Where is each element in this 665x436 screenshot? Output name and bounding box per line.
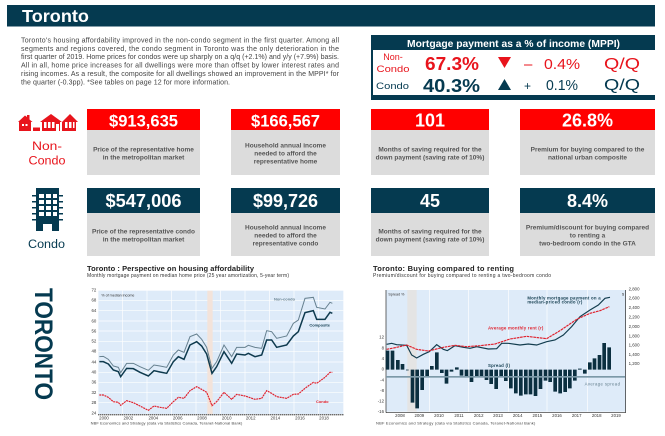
chart labels: 4 [382, 356, 385, 361]
card: premium condo: 8.4% [567, 191, 608, 211]
chart source: NBF Economics and Strategy (data via Statistics Canada, Teranet-National Bank) [376, 420, 536, 425]
chart labels: % of median income [101, 293, 134, 297]
chart labels: 2011 [454, 413, 464, 418]
MPPI row: condo: Condo [376, 81, 409, 92]
chart heading: affordability: Monthly mortgage payment on median home price (25 year amortization, 5-year term) [87, 273, 289, 279]
chart heading: buying vs renting: Toronto: Buying compared to renting [373, 264, 514, 273]
MPPI row: condo [376, 75, 640, 96]
card: representative condo price [87, 188, 200, 256]
card: premium condo: two-bedroom condo in the GTA [539, 240, 636, 248]
chart labels: 2006 [173, 416, 183, 421]
chart labels: 2016 [295, 416, 305, 421]
chart labels: 1,400 [629, 352, 640, 357]
chart labels: Spread % [388, 293, 405, 297]
chart heading: buying vs renting: Premium/discount for buying compared to renting a two-bedroom condo [373, 273, 551, 279]
chart labels: -16 [378, 409, 385, 414]
card: months saving condo: down payment (saving rate of 10%) [376, 236, 484, 244]
card: premium non-condo: 26.8% [562, 110, 613, 130]
chart labels: 2014 [513, 413, 523, 418]
chart labels: 2014 [271, 416, 281, 421]
card: household income condo: Household annual income [245, 224, 326, 232]
chart labels: 2018 [319, 416, 329, 421]
card: months saving condo: Months of saving required for the [378, 228, 482, 236]
chart labels: 2000 [99, 416, 109, 421]
chart labels: 36 [92, 380, 97, 385]
label: non-condo: Non- [32, 141, 62, 153]
chart labels: 12 [379, 335, 385, 340]
chart labels: 2016 [552, 413, 562, 418]
card: months saving non-condo: 101 [415, 110, 445, 130]
chart labels: 72 [92, 287, 97, 292]
chart labels: 2012 [246, 416, 256, 421]
intro text block: All in all, home price increases for all dwellings were more than offset by lower interest rates and [21, 62, 339, 70]
MPPI row: non-condo: – [524, 56, 533, 73]
card: premium condo: Premium/discount for buying compared [526, 224, 649, 232]
card: representative condo price: Price of the representative condo [92, 228, 195, 236]
series: non-condo [99, 297, 332, 373]
chart heading: buying vs renting [373, 264, 551, 279]
chart labels: -4 [380, 377, 385, 382]
card: premium condo [520, 188, 655, 256]
chart labels: 44 [92, 359, 97, 364]
MPPI row: non-condo: Condo [376, 64, 410, 74]
title banner: Toronto [22, 6, 89, 26]
chart labels: median-priced condo (r) [527, 300, 583, 305]
chart labels: $ [622, 293, 624, 297]
chart labels: 2009 [415, 413, 425, 418]
chart labels: 64 [92, 308, 97, 313]
chart labels: Average spread [585, 381, 621, 386]
title banner [7, 5, 655, 26]
chart labels: 2008 [197, 416, 207, 421]
chart source: NBF Economics and Strategy (data via Statistics Canada, Teranet-National Bank) [91, 421, 243, 426]
chart labels: 1,600 [629, 343, 640, 348]
chart labels: 2012 [474, 413, 484, 418]
chart labels: 2,200 [629, 315, 640, 320]
chart labels: 28 [92, 400, 97, 405]
chart labels: 60 [92, 318, 97, 323]
chart labels: 8 [382, 345, 385, 350]
card: household income condo: $99,726 [253, 191, 318, 211]
chart labels: Composite [309, 323, 331, 328]
intro text block: rising incomes. As a result, the composite for all dwellings showed an improvement in the MPPI* for [21, 71, 340, 78]
intro text block: Toronto's housing affordability improved in the non-condo segment in the first quarter. Among all [21, 38, 339, 44]
series: composite [99, 311, 332, 377]
chart labels: 2010 [434, 413, 444, 418]
intro text block: the quarter (-0.3pp). *See tables on page 12 for more information. [21, 80, 230, 86]
chart labels: 2015 [533, 413, 543, 418]
MPPI row: non-condo: 67.3% [425, 53, 479, 74]
chart labels: 0 [382, 367, 385, 372]
card: representative home price: $913,635 [109, 112, 178, 130]
card: months saving non-condo: Months of saving required for the [378, 146, 482, 154]
card: months saving condo [371, 188, 489, 256]
card: premium condo: to renting a [570, 232, 606, 240]
label: condo: Condo [28, 239, 65, 251]
series: mortgage payment [387, 297, 610, 358]
line chart: affordability [91, 287, 343, 426]
MPPI row: condo: 40.3% [423, 75, 480, 96]
intro text block: segments and regions covered, the condo segment in Toronto was the only deterioration in the [21, 46, 339, 53]
panel: MPPI mortgage payment table [371, 35, 655, 100]
chart labels: 2010 [222, 416, 232, 421]
chart heading: affordability: Toronto : Perspective on housing affordability [87, 264, 255, 273]
chart labels: 1,200 [629, 361, 640, 366]
chart labels: Spread (l) [488, 363, 511, 368]
chart labels: Monthly mortgage payment on a [527, 295, 601, 300]
chart labels: 56 [92, 328, 97, 333]
MPPI row: non-condo: 0.4% [544, 56, 580, 73]
icon: condo building [32, 188, 63, 231]
chart labels: 68 [92, 298, 97, 303]
card: premium non-condo: national urban composite [548, 154, 627, 162]
card: representative home price: in the metropolitan market [103, 154, 185, 162]
chart labels: 32 [92, 390, 97, 395]
chart labels: 40 [92, 370, 97, 375]
chart labels: -12 [378, 399, 385, 404]
card: household income non-condo: needed to afford the [254, 150, 317, 158]
chart labels: 2002 [124, 416, 134, 421]
intro text block [21, 38, 340, 86]
card: months saving condo: 45 [420, 191, 440, 211]
card: months saving non-condo [371, 109, 489, 175]
chart labels: 2,000 [629, 324, 640, 329]
card: representative home price: Price of the representative home [93, 146, 194, 154]
series: monthly rent [387, 307, 609, 351]
chart labels: 2008 [395, 413, 405, 418]
chart labels: 2018 [592, 413, 602, 418]
card: representative condo price: in the metropolitan market [103, 236, 185, 244]
bars: spread [386, 343, 611, 408]
chart labels: 2013 [493, 413, 503, 418]
card: household income condo: representative condo [253, 240, 318, 248]
MPPI row: non-condo [376, 52, 640, 74]
chart labels [92, 287, 331, 421]
MPPI row: non-condo: Non- [383, 52, 403, 62]
card: household income condo [231, 188, 340, 256]
chart labels: 2019 [611, 413, 621, 418]
intro text block: first quarter of 2019. Home prices for condos were up sharply on a q/q (+2.1%) and y/y (+7.9%) basis. [21, 54, 339, 61]
series: condo [99, 372, 332, 410]
card: representative home price [87, 109, 200, 175]
chart labels: 2,400 [629, 305, 640, 310]
combo chart: buying vs renting [376, 287, 640, 425]
icon: houses [18, 114, 78, 131]
chart labels: 52 [92, 339, 97, 344]
card: household income non-condo: $166,567 [251, 112, 320, 130]
chart labels: 2017 [572, 413, 582, 418]
chart labels: 2,800 [629, 287, 640, 292]
card: representative condo price: $547,006 [106, 191, 182, 211]
average spread line [386, 376, 625, 378]
card: household income non-condo [231, 109, 340, 175]
MPPI row: non-condo: Q/Q [604, 56, 640, 73]
chart labels: 24 [92, 410, 97, 415]
label: non-condo [28, 141, 66, 168]
vertical city name: TORONTO [29, 288, 57, 400]
chart labels: Average monthly rent (r) [488, 326, 544, 331]
chart labels: -8 [380, 388, 385, 393]
chart labels: 2,600 [629, 296, 640, 301]
chart heading: affordability [87, 264, 289, 279]
chart labels: 1,800 [629, 333, 640, 338]
card: household income condo: needed to afford the [254, 232, 317, 240]
chart labels: Non-condo [274, 297, 296, 302]
chart labels: Condo [316, 399, 329, 404]
card: household income non-condo: Household annual income [245, 142, 326, 150]
chart labels: 2004 [149, 416, 159, 421]
card: premium non-condo: Premium for buying compared to the [531, 146, 645, 154]
card: months saving non-condo: down payment (saving rate of 10%) [376, 154, 484, 162]
MPPI row: condo: + [524, 79, 531, 93]
card: premium non-condo [520, 109, 655, 175]
card: household income non-condo: representative home [254, 158, 318, 166]
MPPI row: condo: 0.1% [546, 77, 578, 94]
label: non-condo: Condo [28, 156, 66, 168]
chart labels: 48 [92, 349, 97, 354]
MPPI row: condo: Q/Q [604, 77, 640, 94]
chart labels [378, 287, 640, 418]
MPPI heading: Mortgage payment as a % of income (MPPI) [407, 39, 620, 50]
